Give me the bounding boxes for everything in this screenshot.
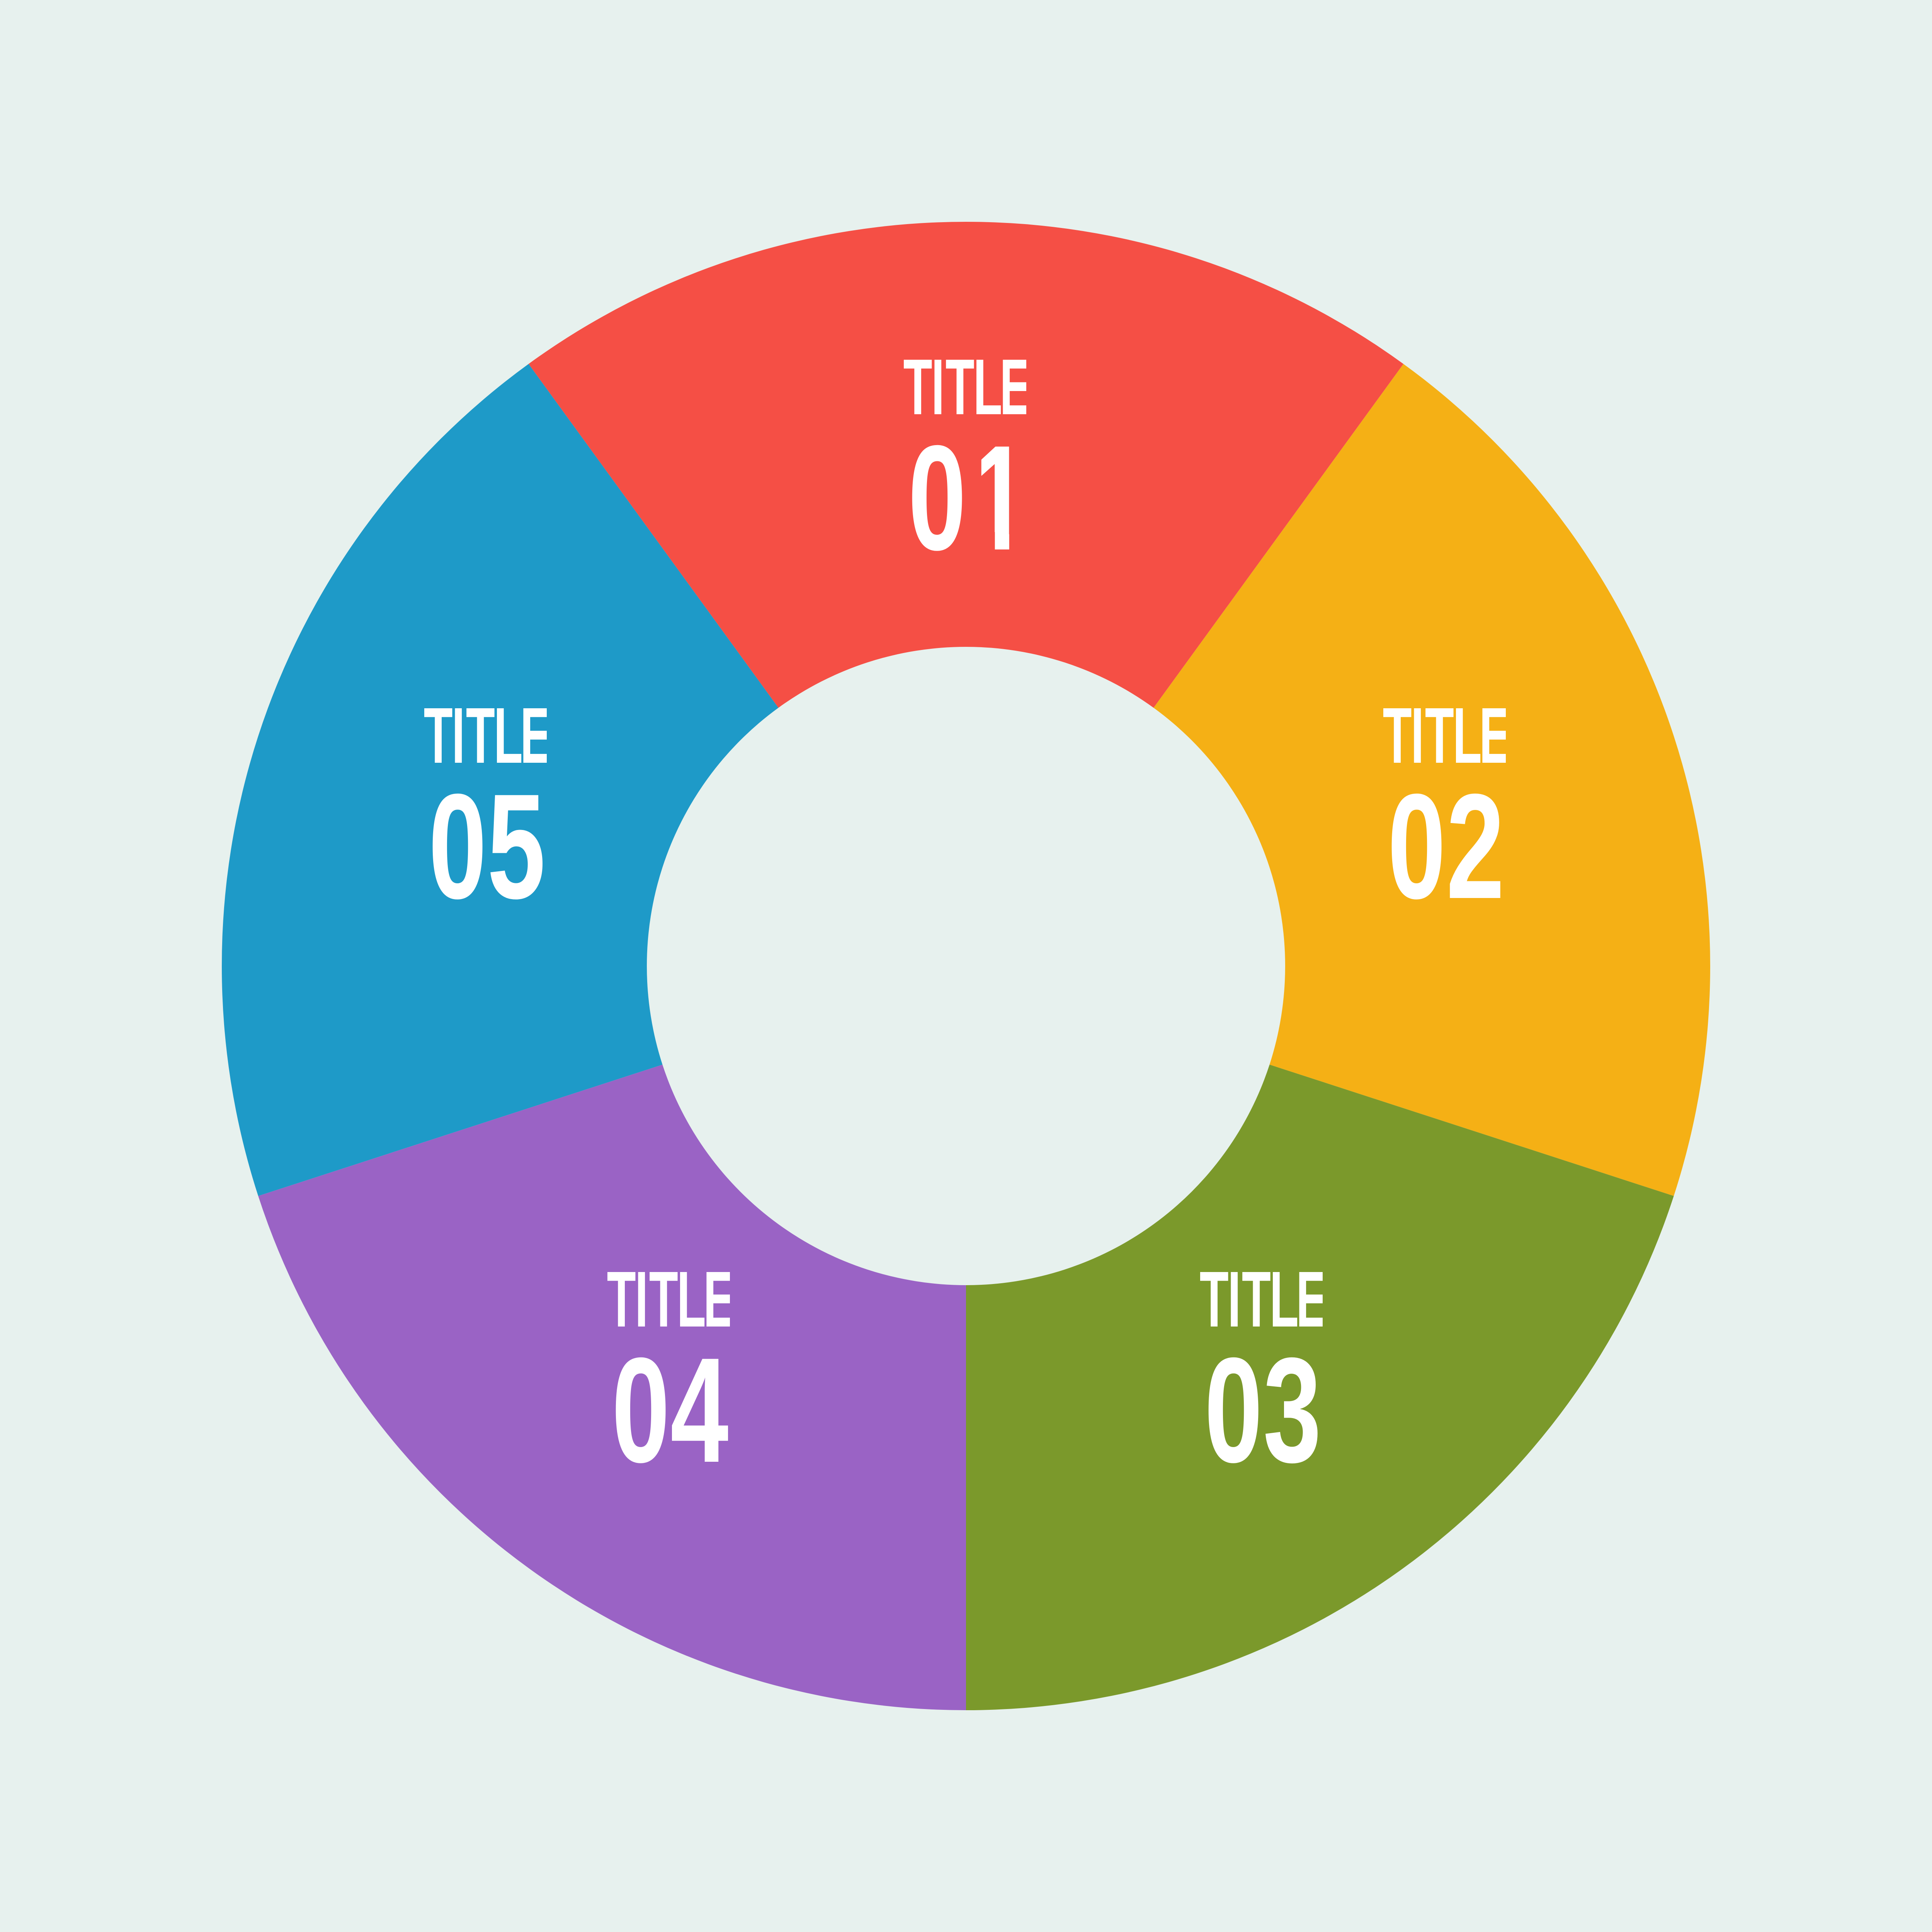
title 02: TITLE: [1383, 691, 1511, 780]
title 05: TITLE: [424, 691, 552, 780]
title 03: TITLE: [1200, 1255, 1328, 1344]
title 01: TITLE: [903, 342, 1031, 431]
segment 01: red: [529, 222, 1403, 708]
label 01: [904, 360, 1026, 551]
label 03: [1200, 1272, 1323, 1464]
donut chart: [222, 222, 1710, 1710]
number 04: 04: [612, 1327, 729, 1493]
segment 04: purple: [258, 1065, 966, 1710]
segment 03: green: [966, 1065, 1674, 1710]
title 04: TITLE: [607, 1255, 735, 1344]
label 04: [607, 1255, 735, 1493]
number 05: 05: [429, 763, 546, 930]
segment 05: blue: [222, 364, 778, 1196]
number 03: 03: [1204, 1327, 1321, 1493]
number 01: 01: [908, 414, 1029, 581]
label 02: [1383, 708, 1506, 900]
label 05: [424, 691, 552, 930]
segment 02: amber: [1154, 364, 1710, 1196]
number 02: 02: [1388, 763, 1505, 930]
